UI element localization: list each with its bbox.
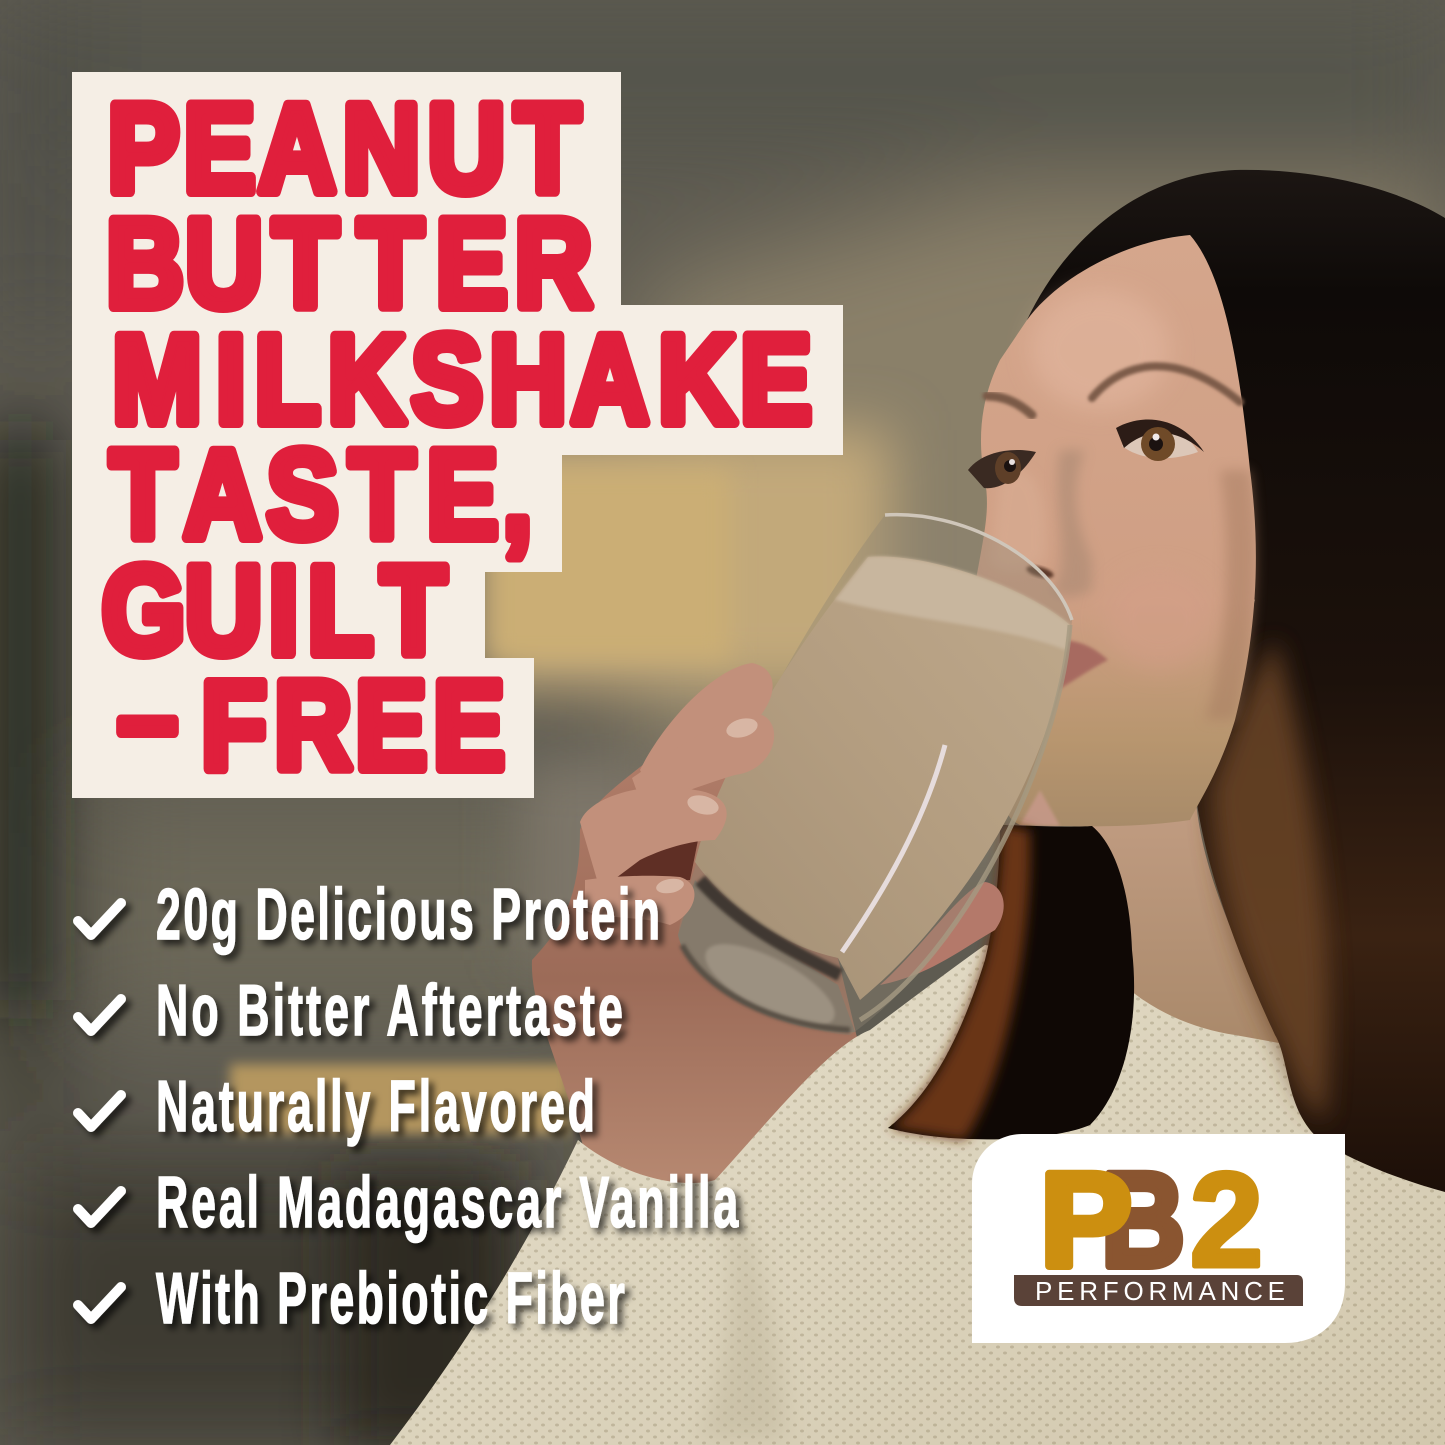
logo wordmark: 2 bbox=[1190, 1146, 1263, 1295]
front lock of hair bbox=[888, 825, 1134, 1140]
item: 20g Delicious Protein: 20g Delicious Protein bbox=[156, 874, 660, 955]
headline text: TASTE, bbox=[110, 424, 532, 564]
item: No Bitter Aftertaste: No Bitter Aftertaste bbox=[156, 970, 623, 1051]
headline text: –FREE bbox=[118, 646, 505, 795]
left eye bbox=[968, 450, 1036, 488]
headline text: GUILT bbox=[102, 540, 446, 680]
hair highlights bbox=[1210, 640, 1329, 1120]
fingers bbox=[580, 663, 774, 925]
far hand thumb bbox=[880, 882, 1004, 985]
glass base bbox=[678, 880, 855, 1032]
milkshake bbox=[695, 557, 1070, 1000]
benefits checklist bbox=[78, 874, 739, 1339]
headline panel bbox=[72, 72, 843, 798]
headline text: PEANUT bbox=[108, 78, 580, 218]
panel background bbox=[72, 72, 843, 798]
glass bbox=[678, 515, 1072, 1042]
highlight streak bbox=[842, 745, 945, 952]
sweater bbox=[390, 945, 1445, 1445]
right brow bbox=[1092, 366, 1240, 402]
left brow bbox=[987, 396, 1032, 415]
hair bbox=[1027, 170, 1445, 1192]
right eye bbox=[1116, 420, 1204, 461]
face bbox=[975, 235, 1256, 826]
liquid bottom ring bbox=[700, 880, 840, 975]
logo wordmark bbox=[1040, 1146, 1263, 1295]
item: Real Madagascar Vanilla: Real Madagascar Vanilla bbox=[156, 1162, 739, 1243]
logo wordmark: P bbox=[1040, 1146, 1132, 1295]
item: Naturally Flavored: Naturally Flavored bbox=[156, 1066, 595, 1147]
shadow between fingers bbox=[600, 825, 700, 885]
banner label: PERFORMANCE bbox=[1035, 1276, 1285, 1306]
headline text: BUTTER bbox=[106, 193, 592, 333]
foam bbox=[835, 557, 1070, 650]
neck bbox=[1090, 780, 1290, 1060]
headline text: MILKSHAKE bbox=[112, 309, 812, 449]
woman drinking a milkshake bbox=[390, 170, 1445, 1445]
item: With Prebiotic Fiber: With Prebiotic Fiber bbox=[156, 1258, 625, 1339]
logo badge: PB2 Performance bbox=[972, 1134, 1345, 1343]
logo banner bbox=[1014, 1275, 1303, 1306]
nostril bbox=[1025, 564, 1055, 580]
hand and wrist bbox=[532, 750, 860, 1210]
logo wordmark: B bbox=[1101, 1146, 1185, 1295]
lips bbox=[1058, 640, 1108, 690]
rim bbox=[885, 515, 1072, 620]
right glass edge bbox=[860, 625, 1070, 1020]
headline text bbox=[102, 78, 812, 795]
